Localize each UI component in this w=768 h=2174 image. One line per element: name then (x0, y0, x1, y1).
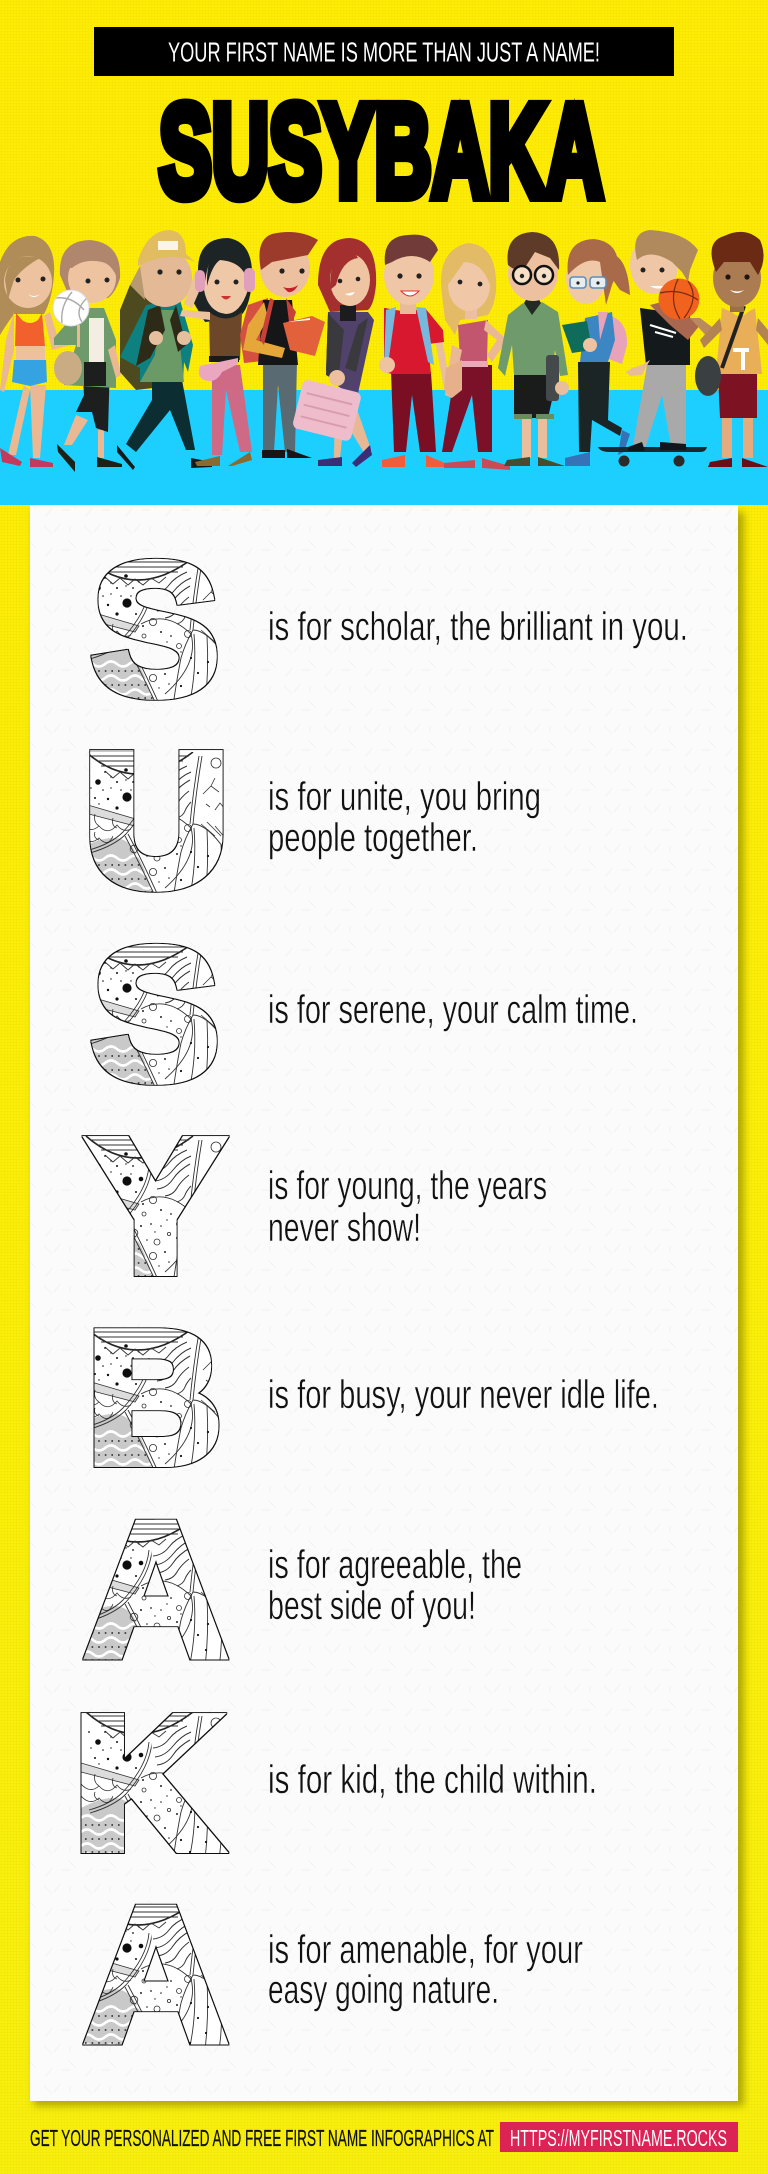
row: A agreeable (85, 1484, 522, 1696)
text: unite: is for unite, you bring (268, 775, 541, 819)
main white panel (30, 505, 744, 2106)
letter Y: Y (92, 1103, 219, 1308)
text: amenable (268, 1928, 583, 2012)
text: kid: is for kid, the child within. (268, 1758, 597, 1802)
row: U unite (86, 717, 541, 922)
text: young: is for young, the years (268, 1164, 547, 1208)
student 1 (0, 236, 82, 467)
student 10 (562, 239, 630, 466)
student 8 (441, 243, 510, 470)
text: amenable: easy going nature. (268, 1968, 499, 2012)
cyan floor (0, 390, 768, 505)
student 12 (695, 232, 768, 467)
student 7 (379, 235, 454, 467)
student 3 (117, 230, 212, 470)
text: young (268, 1164, 547, 1250)
text: unite: people together. (268, 816, 478, 860)
row: S serene (92, 912, 638, 1118)
text: unite (268, 775, 541, 860)
letter K: K (76, 1680, 215, 1885)
student 5 (240, 232, 325, 458)
top banner (94, 27, 674, 76)
text: amenable: is for amenable, for your (268, 1928, 583, 1972)
text: young: never show! (268, 1206, 421, 1250)
row: K kid (76, 1680, 597, 1885)
student 2 (53, 240, 122, 472)
student 4 (180, 238, 255, 466)
letter A: A (85, 1484, 227, 1696)
letter S: S (92, 912, 219, 1118)
text: agreeable (268, 1543, 522, 1628)
text: agreeable: best side of you! (268, 1584, 476, 1628)
letter U: U (86, 717, 227, 922)
student 9 (498, 232, 569, 466)
row: B busy (87, 1293, 659, 1502)
illustration: group of students (0, 230, 768, 472)
row: A amenable (85, 1869, 583, 2081)
letter B: B (87, 1293, 222, 1502)
student 11 (598, 230, 716, 466)
text: serene: is for serene, your calm time. (268, 988, 638, 1032)
student 6 (292, 238, 376, 467)
letter S: S (92, 527, 219, 733)
footer (30, 2122, 738, 2152)
text: agreeable: is for agreeable, the (268, 1543, 522, 1587)
row: S scholar (92, 527, 688, 733)
row: Y young (92, 1103, 547, 1308)
letter A: A (85, 1869, 227, 2081)
